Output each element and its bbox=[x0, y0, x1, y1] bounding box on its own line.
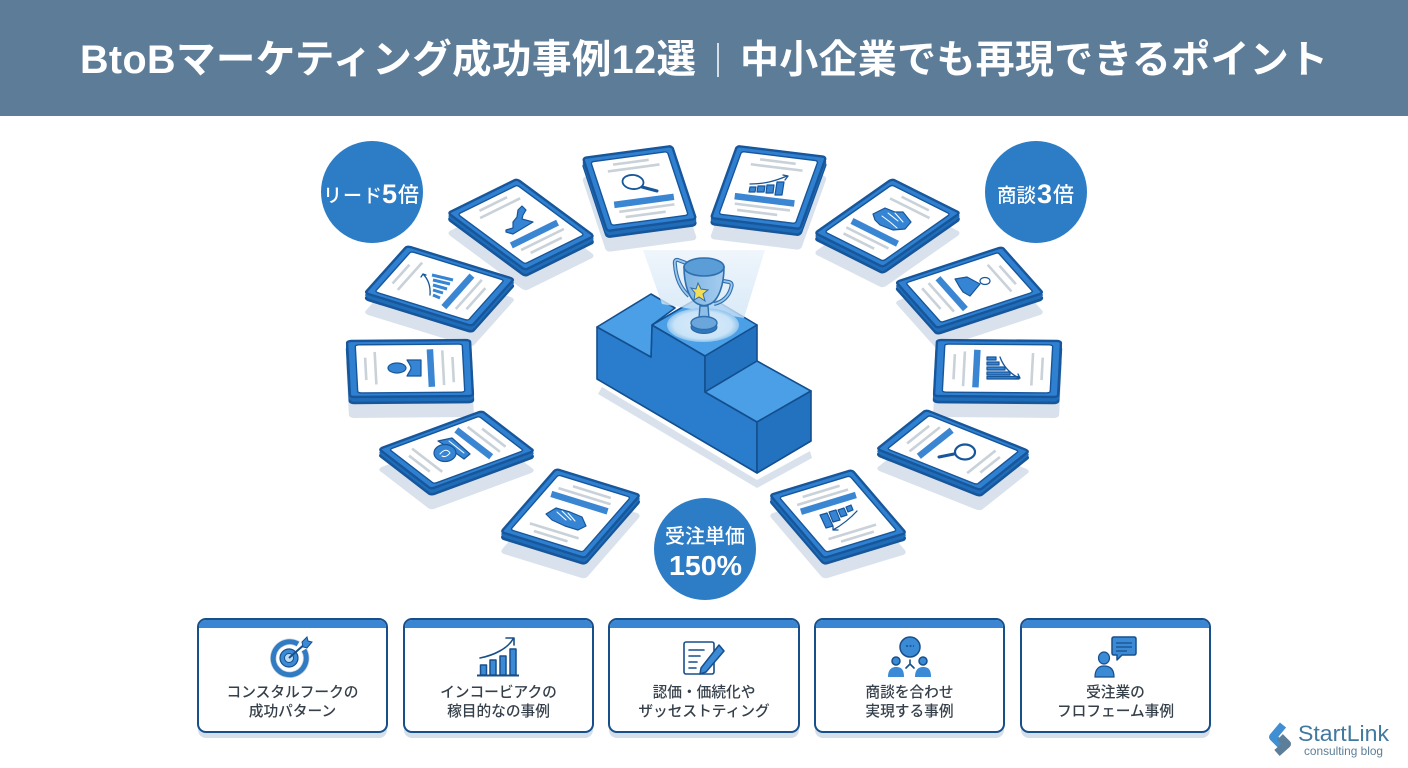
caption bbox=[638, 683, 770, 720]
icon: document and pencil bbox=[684, 642, 724, 674]
panel: 認価・価続化 bbox=[609, 619, 799, 738]
icon: person bbox=[388, 360, 421, 376]
icon: handshake bbox=[873, 208, 911, 230]
card 2: mountain chart bbox=[448, 179, 594, 290]
icon: magnifier bbox=[939, 444, 975, 460]
card 7: growth chart bbox=[711, 146, 826, 249]
icon: puzzle bbox=[955, 277, 990, 296]
panel: 商談を合わせ bbox=[815, 619, 1004, 738]
caption bbox=[865, 684, 954, 720]
badge: 受注単価150%: 150% bbox=[669, 550, 742, 581]
caption: 成功パターン bbox=[249, 703, 336, 720]
card 1: magnifier bbox=[583, 146, 696, 251]
spotlight glow bbox=[667, 308, 739, 342]
icon: mountain bbox=[506, 206, 533, 234]
title: 中小企業でも再現できるポイント bbox=[740, 39, 1328, 82]
card 5: stack bbox=[379, 411, 534, 509]
caption: 稼目的なの事例 bbox=[447, 703, 550, 720]
caption: インコービアクの bbox=[440, 684, 557, 701]
caption: 認価・価続化や bbox=[653, 683, 755, 701]
title band bbox=[0, 0, 1408, 116]
caption: フロフェーム事例 bbox=[1057, 703, 1174, 720]
logo: StartLink: consulting blog bbox=[1304, 744, 1383, 758]
badge: 受注単価150%: 受注単価 bbox=[665, 525, 745, 548]
card 11: magnifier bbox=[877, 410, 1029, 510]
icon: handshake bbox=[546, 508, 586, 530]
badge: 受注単価150% bbox=[654, 498, 756, 600]
caption: 商談を合わせ bbox=[865, 684, 954, 701]
panel: インコービアク bbox=[404, 619, 593, 738]
caption: コンスタルフークの bbox=[227, 684, 358, 701]
spotlight beam bbox=[643, 250, 765, 318]
caption: 受注業の bbox=[1086, 683, 1145, 701]
podium bbox=[597, 294, 812, 488]
icon: person with speech bubble bbox=[1095, 637, 1136, 677]
caption bbox=[227, 684, 358, 720]
icon: logo mark bbox=[1273, 725, 1287, 753]
badge: リード5倍: 倍 bbox=[398, 184, 419, 207]
icon: steps bbox=[987, 357, 1020, 379]
icon: funnel bbox=[421, 274, 453, 298]
caption: ザッセストティング bbox=[638, 703, 770, 720]
card 4: person bbox=[347, 340, 473, 417]
icon: bars with arrow bbox=[820, 505, 857, 530]
badge: 商談3倍: 3 bbox=[1037, 179, 1052, 209]
caption: 実現する事例 bbox=[865, 703, 954, 720]
icon: bar chart bbox=[477, 638, 519, 676]
caption bbox=[1057, 683, 1174, 720]
icon: target bbox=[273, 637, 312, 675]
title: BtoBマーケティング成功事例12選 bbox=[80, 38, 696, 82]
panel: コンスタルフーク bbox=[198, 619, 387, 738]
logo: StartLink: StartLink bbox=[1298, 721, 1390, 746]
caption bbox=[440, 684, 557, 720]
icon: growth chart bbox=[749, 175, 788, 195]
card 9: puzzle bbox=[896, 247, 1043, 348]
badge: 商談3倍: 倍 bbox=[1053, 184, 1074, 207]
badge: リード5倍: リード bbox=[323, 186, 382, 207]
card 6: handshake bbox=[501, 469, 640, 578]
panel: 受注業 bbox=[1021, 619, 1210, 738]
card 12: bars with arrow bbox=[770, 470, 906, 578]
icon: stack bbox=[434, 438, 470, 462]
badge: 商談3倍 bbox=[985, 141, 1087, 243]
card 8: handshake bbox=[815, 179, 960, 287]
badge: リード5倍: 5 bbox=[382, 179, 397, 209]
title bbox=[80, 38, 1328, 82]
icon: magnifier bbox=[622, 174, 657, 191]
logo: StartLink bbox=[1273, 721, 1390, 758]
icon: trophy bbox=[675, 258, 732, 334]
icon: people meeting bbox=[888, 637, 931, 677]
card 10: steps bbox=[934, 340, 1061, 417]
badge: 商談3倍: 商談 bbox=[997, 185, 1036, 207]
badge: リード5倍 bbox=[321, 141, 423, 243]
card 3: funnel bbox=[365, 246, 514, 346]
podium shadow bbox=[598, 387, 812, 488]
